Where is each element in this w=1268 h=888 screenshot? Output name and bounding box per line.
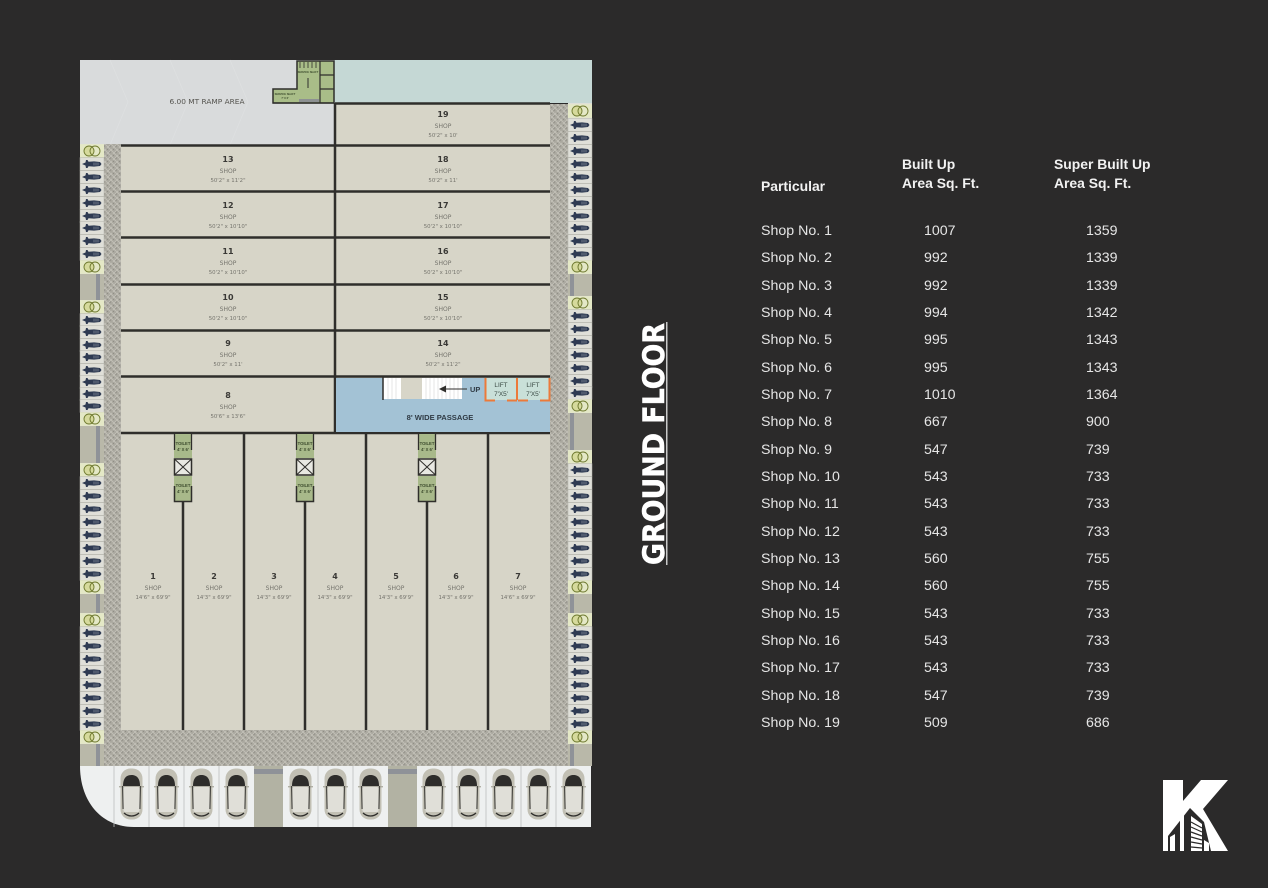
table rows: Shop No. 14: [761, 578, 840, 594]
shop labels: right column: 19: [437, 110, 449, 119]
lift 2: 7'X5': [526, 391, 540, 398]
table rows: 543: [924, 469, 948, 485]
shop labels: left column: 50'2" x 10'10": [209, 224, 247, 230]
shop labels: right column: SHOP: [435, 260, 452, 267]
shop labels: left column: [209, 155, 247, 420]
right two-wheeler parking strip: [568, 103, 592, 766]
title: ground floor: GROUND FLOOR: [637, 323, 671, 565]
logo: K with building: [1163, 780, 1228, 851]
table rows: 755: [1086, 578, 1110, 594]
shop labels: bottom row: SHOP: [206, 585, 223, 592]
table rows: 509: [924, 715, 948, 731]
table rows: 686: [1086, 715, 1110, 731]
shop labels: left column: 50'2" x 10'10": [209, 316, 247, 322]
toilet block 2: 4' X 6': [299, 447, 311, 452]
core: staircase and service rooms: SERVICE SHAFT: [275, 92, 296, 96]
shop labels: right column: 50'2" x 10': [428, 133, 458, 139]
table rows: Shop No. 4: [761, 305, 832, 321]
shop labels: right column: 50'2" x 11'2": [425, 362, 461, 368]
table rows: Shop No. 3: [761, 278, 832, 294]
shop labels: bottom row: SHOP: [266, 585, 283, 592]
staircase: [383, 377, 462, 400]
table rows: 733: [1086, 524, 1110, 540]
shop labels: bottom row: SHOP: [448, 585, 465, 592]
shop labels: left column: SHOP: [220, 260, 237, 267]
shop labels: bottom row: 3: [271, 572, 277, 581]
toilet block 3: 4' X 6': [421, 447, 433, 452]
area table: [761, 156, 1150, 731]
toilet block 3: 4' X 6': [421, 489, 433, 494]
toilet block 2: TOILET: [298, 483, 313, 488]
table rows: 543: [924, 633, 948, 649]
table rows: 547: [924, 688, 948, 704]
shop labels: right column: 50'2" x 10'10": [424, 270, 462, 276]
table rows: 733: [1086, 660, 1110, 676]
shop labels: left column: 12: [222, 201, 234, 210]
table rows: 560: [924, 551, 948, 567]
table rows: Shop No. 15: [761, 606, 840, 622]
floor plan: [80, 60, 592, 827]
toilet block 1: TOILET: [176, 441, 191, 446]
toilet block 3: TOILET: [420, 483, 435, 488]
lift 1: LIFT: [494, 382, 508, 389]
table rows: 733: [1086, 606, 1110, 622]
table rows: 733: [1086, 633, 1110, 649]
ramp area: [80, 60, 335, 145]
table rows: 543: [924, 606, 948, 622]
shop labels: bottom row: SHOP: [510, 585, 527, 592]
table rows: 1339: [1086, 278, 1118, 294]
table rows: Shop No. 7: [761, 387, 832, 403]
shop labels: left column: SHOP: [220, 214, 237, 221]
shop labels: bottom row: 14'3" x 69'9": [317, 595, 353, 601]
table rows: 900: [1086, 414, 1110, 430]
shop labels: right column: SHOP: [435, 168, 452, 175]
toilet block 1: TOILET: [176, 483, 191, 488]
table rows: Shop No. 9: [761, 442, 832, 458]
lift 2: [518, 378, 550, 400]
shop labels: bottom row: 2: [211, 572, 217, 581]
shop labels: left column: SHOP: [220, 168, 237, 175]
shop labels: left column: 50'2" x 10'10": [209, 270, 247, 276]
table header: Built Up: [902, 156, 955, 172]
shop labels: left column: 11: [222, 247, 234, 256]
shops floor: [121, 104, 550, 730]
table rows: 992: [924, 250, 948, 266]
toilet block 2: 4' X 6': [299, 489, 311, 494]
arrow: up: UP: [470, 385, 480, 394]
left two-wheeler parking strip: [80, 144, 104, 766]
table header: Area Sq. Ft.: [1054, 175, 1131, 191]
shop labels: left column: 50'2" x 11': [213, 362, 243, 368]
table rows: Shop No. 17: [761, 660, 840, 676]
shop labels: bottom row: 6: [453, 572, 459, 581]
shop wall lines: [121, 103, 550, 730]
table rows: 667: [924, 414, 948, 430]
shop labels: bottom row: 4: [332, 572, 338, 581]
table rows: 994: [924, 305, 948, 321]
shop labels: left column: SHOP: [220, 306, 237, 313]
shop labels: right column: SHOP: [435, 123, 452, 130]
table rows: 995: [924, 360, 948, 376]
shop labels: bottom row: 7: [515, 572, 521, 581]
lift 1: 7'X5': [494, 391, 508, 398]
toilet block 1: 4' X 6': [177, 447, 189, 452]
core: staircase and service rooms: SERVICE SHAFT: [298, 70, 319, 74]
toilet block 1: 4' X 6': [177, 489, 189, 494]
table rows: 995: [924, 332, 948, 348]
table rows: [761, 223, 1118, 731]
shop labels: left column: 8: [225, 391, 231, 400]
table rows: Shop No. 5: [761, 332, 832, 348]
shop labels: right column: 14: [437, 339, 449, 348]
shop labels: left column: SHOP: [220, 404, 237, 411]
core: staircase and service rooms: [273, 61, 334, 103]
shop labels: right column: SHOP: [435, 214, 452, 221]
table rows: 739: [1086, 442, 1110, 458]
table rows: 560: [924, 578, 948, 594]
shop labels: left column: 50'6" x 13'6": [210, 414, 246, 420]
toilet block 2: TOILET: [298, 441, 313, 446]
table rows: Shop No. 10: [761, 469, 840, 485]
car parking row: [80, 766, 591, 827]
table rows: 547: [924, 442, 948, 458]
table rows: 733: [1086, 469, 1110, 485]
shop labels: right column: 50'2" x 10'10": [424, 224, 462, 230]
arrow: up: [439, 385, 480, 394]
lift 1: [485, 378, 517, 400]
teal open area: [334, 60, 592, 103]
paved driveway: [104, 104, 568, 766]
shop labels: bottom row: 1: [150, 572, 156, 581]
shop labels: right column: 18: [437, 155, 449, 164]
shop labels: left column: 9: [225, 339, 231, 348]
shop labels: right column: 17: [437, 201, 449, 210]
table rows: 739: [1086, 688, 1110, 704]
table rows: 1339: [1086, 250, 1118, 266]
shop labels: right column: 50'2" x 10'10": [424, 316, 462, 322]
table header: Area Sq. Ft.: [902, 175, 979, 191]
toilet block 3: [418, 434, 436, 502]
table rows: 1359: [1086, 223, 1118, 239]
toilet block 3: TOILET: [420, 441, 435, 446]
passage, stairs and lifts: 8' WIDE PASSAGE: [407, 413, 473, 422]
table rows: Shop No. 2: [761, 250, 832, 266]
table rows: Shop No. 18: [761, 688, 840, 704]
table rows: 755: [1086, 551, 1110, 567]
shop labels: right column: 15: [437, 293, 449, 302]
table rows: Shop No. 12: [761, 524, 840, 540]
table rows: Shop No. 11: [761, 496, 839, 512]
table rows: Shop No. 13: [761, 551, 840, 567]
table rows: 543: [924, 496, 948, 512]
shop labels: bottom row: [135, 572, 536, 601]
shop labels: bottom row: SHOP: [388, 585, 405, 592]
ramp area: 6.00 MT RAMP AREA: [169, 97, 245, 106]
shop labels: bottom row: 14'3" x 69'9": [438, 595, 474, 601]
shop labels: left column: SHOP: [220, 352, 237, 359]
table header: Super Built Up: [1054, 156, 1150, 172]
shop labels: left column: 13: [222, 155, 234, 164]
table rows: 1343: [1086, 360, 1118, 376]
table rows: 1007: [924, 223, 956, 239]
table rows: 1010: [924, 387, 956, 403]
shop labels: right column: [424, 110, 462, 368]
table header: [761, 156, 1150, 194]
shop labels: right column: 50'2" x 11': [428, 178, 458, 184]
passage, stairs and lifts: [336, 377, 550, 432]
shop labels: bottom row: SHOP: [145, 585, 162, 592]
shop labels: bottom row: 14'6" x 69'9": [500, 595, 536, 601]
table rows: Shop No. 6: [761, 360, 832, 376]
table rows: 543: [924, 660, 948, 676]
shop labels: right column: SHOP: [435, 306, 452, 313]
shop labels: bottom row: SHOP: [327, 585, 344, 592]
shop labels: right column: SHOP: [435, 352, 452, 359]
shop labels: left column: 50'2" x 11'2": [210, 178, 246, 184]
table rows: 1343: [1086, 332, 1118, 348]
table rows: Shop No. 8: [761, 414, 832, 430]
table rows: Shop No. 19: [761, 715, 840, 731]
shop labels: bottom row: 14'3" x 69'9": [378, 595, 414, 601]
shop labels: right column: 16: [437, 247, 449, 256]
table rows: Shop No. 16: [761, 633, 840, 649]
table header: Particular: [761, 178, 826, 194]
table rows: 733: [1086, 496, 1110, 512]
lift 2: LIFT: [526, 382, 540, 389]
table rows: 1364: [1086, 387, 1118, 403]
table rows: 543: [924, 524, 948, 540]
shop labels: left column: 10: [222, 293, 234, 302]
table rows: Shop No. 1: [761, 223, 832, 239]
shop labels: bottom row: 5: [393, 572, 399, 581]
table rows: 992: [924, 278, 948, 294]
shop labels: bottom row: 14'3" x 69'9": [196, 595, 232, 601]
shop labels: bottom row: 14'6" x 69'9": [135, 595, 171, 601]
toilet block 1: [174, 434, 192, 502]
core: staircase and service rooms: 7' X 6': [281, 96, 289, 100]
shop labels: bottom row: 14'3" x 69'9": [256, 595, 292, 601]
toilet block 2: [296, 434, 314, 502]
table rows: 1342: [1086, 305, 1118, 321]
